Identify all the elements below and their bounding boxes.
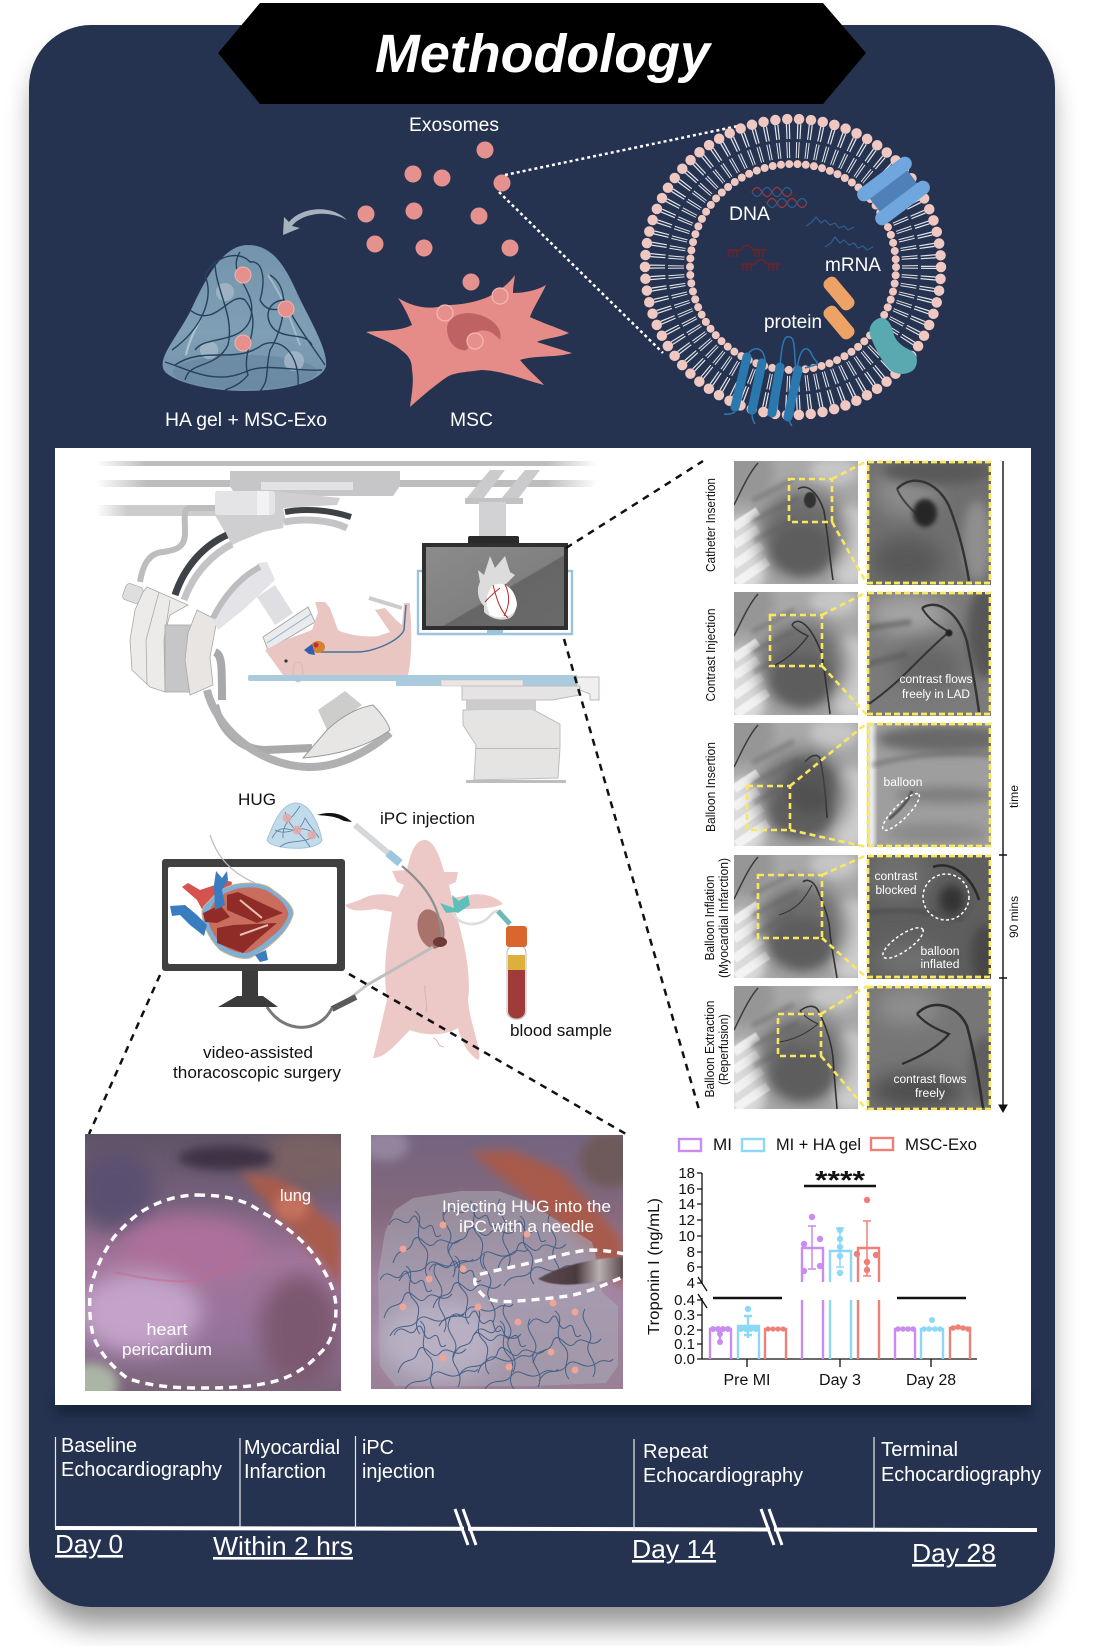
- label: (Reperfusion): [717, 1014, 731, 1085]
- event: baseline: Baseline: [61, 1435, 137, 1457]
- significance: ****: [815, 1165, 866, 1195]
- event: MI: Infarction: [244, 1461, 326, 1483]
- gel particles: [400, 1222, 578, 1374]
- left housing: [130, 587, 217, 695]
- y axis: 10: [678, 1228, 695, 1245]
- event: terminal: Echocardiography: [881, 1464, 1041, 1486]
- monitor screen: [424, 545, 566, 628]
- butterfly needle: [440, 895, 470, 913]
- y axis: [674, 1165, 707, 1368]
- cargo: mRNA strands: [806, 217, 873, 250]
- gel fibres: [380, 1199, 613, 1391]
- bars: Day 28: [895, 1317, 971, 1359]
- label: [703, 858, 731, 978]
- row: balloon inflation: [704, 854, 992, 979]
- legend: MSC-Exo: [905, 1136, 977, 1154]
- event: repeat: Echocardiography: [643, 1465, 803, 1487]
- exosome particles: [358, 142, 518, 290]
- needle: [538, 1257, 623, 1285]
- label: Balloon Inflation: [703, 875, 717, 960]
- label: Exosomes: Exosomes: [409, 115, 499, 136]
- label: iPC injection: iPC injection: [380, 809, 475, 828]
- y axis: 0.3: [674, 1307, 695, 1324]
- outline: balloon: [879, 923, 927, 963]
- arrow: [317, 813, 352, 822]
- y axis title: Troponin I (ng/mL): [646, 1198, 663, 1335]
- x axis: Day 3: [819, 1372, 861, 1389]
- monitor mount: [465, 470, 540, 545]
- connector: [498, 911, 510, 924]
- photo: HUG injection: [371, 1135, 623, 1389]
- legend: MI: [713, 1136, 732, 1154]
- x axis: Pre MI: [724, 1372, 770, 1389]
- label: injecting HUG: Injecting HUG into the: [442, 1197, 611, 1216]
- label: video-assisted thoracoscopic surgery: [173, 1043, 341, 1082]
- knob: [121, 582, 144, 605]
- label: Balloon Insertion: [704, 742, 718, 832]
- event: MI: [244, 1437, 340, 1483]
- timeline: [55, 1435, 1041, 1568]
- annotation: [894, 1074, 967, 1100]
- annotation: contrast: [874, 871, 918, 883]
- blood vial: [506, 926, 527, 1019]
- panel: exosome production: [163, 115, 941, 431]
- catheter: [320, 605, 406, 652]
- label: gel: HA gel + MSC-Exo: [165, 410, 327, 431]
- annotation: inflated: [920, 959, 960, 971]
- row: contrast injection: [706, 590, 992, 716]
- zoom lines: [89, 461, 703, 1134]
- monitor heart: [478, 556, 517, 620]
- label: injecting HUG: iPC with a needle: [459, 1217, 594, 1236]
- y axis: 18: [678, 1165, 695, 1182]
- axis: [55, 1528, 1037, 1530]
- x axis: [702, 1359, 977, 1389]
- monitor frame: [418, 571, 572, 634]
- cargo: tRNA: [727, 246, 781, 271]
- outline: needle: [475, 1250, 625, 1302]
- y axis: 12: [678, 1212, 695, 1229]
- label: (Myocardial Infarction): [717, 858, 731, 978]
- cargo: protein: [821, 274, 857, 342]
- photo: heart and lung: [85, 1134, 341, 1391]
- annotation: balloon: [884, 777, 922, 789]
- event: MI: Myocardial: [244, 1437, 340, 1459]
- arrow: time axis: [999, 461, 1007, 1112]
- label: heart pericardium: heart: [146, 1320, 188, 1339]
- day: within 2 hrs: Within 2 hrs: [213, 1531, 353, 1561]
- ceiling rail: [96, 461, 597, 487]
- exposed heart: [413, 906, 449, 952]
- label: DNA: DNA: [729, 204, 770, 225]
- horizontal arm: [96, 505, 221, 516]
- day: 14: Day 14: [632, 1534, 716, 1564]
- y axis: 4: [687, 1275, 695, 1292]
- label: 90 mins: 90 mins: [1007, 896, 1021, 938]
- cable: [140, 508, 216, 582]
- table base: [462, 686, 580, 780]
- y axis: 0.1: [674, 1336, 695, 1353]
- y axis: 14: [678, 1196, 695, 1213]
- annotation: [920, 946, 960, 971]
- outline: blocked: [923, 874, 969, 920]
- annotation: blocked: [876, 885, 916, 897]
- label: protein: protein: [764, 312, 822, 333]
- carriage: [230, 471, 400, 496]
- row: catheter insertion: [706, 460, 992, 585]
- event: iPC: iPC: [362, 1437, 394, 1459]
- annotation: balloon: [920, 946, 960, 958]
- lower unit: [318, 691, 362, 730]
- label: [703, 1000, 731, 1098]
- annotation: [900, 674, 973, 701]
- syringe: [355, 825, 400, 863]
- icon: HA gel: [163, 245, 326, 391]
- annotation: [874, 871, 918, 897]
- title banner: [218, 3, 866, 104]
- y axis: 0.2: [674, 1322, 695, 1339]
- bars: Day 3: [801, 1197, 879, 1359]
- cargo: DNA: [752, 188, 807, 208]
- y axis: 0.0: [674, 1351, 695, 1368]
- gel overlay: [378, 1191, 618, 1386]
- label: Balloon Extraction: [703, 1000, 717, 1098]
- event: iPC: [362, 1437, 435, 1483]
- arrow: exosomes to gel: [283, 209, 347, 235]
- label: heart pericardium: [122, 1320, 212, 1359]
- annotation: freely: [915, 1088, 945, 1100]
- label: Catheter Insertion: [704, 478, 718, 572]
- panel: x-ray sequence: [703, 441, 1021, 1121]
- outline: heart: [90, 1195, 336, 1388]
- illustration: surgery: [162, 790, 612, 1082]
- label: video-assisted thoracoscopic surgery: thoracoscopic surgery: [173, 1063, 341, 1082]
- label: lung: lung: [280, 1186, 311, 1205]
- y axis: 6: [687, 1259, 695, 1276]
- label: HUG: HUG: [238, 790, 276, 809]
- table: [248, 675, 398, 681]
- monitor: [162, 859, 345, 1007]
- needle: [402, 866, 442, 937]
- legend: MI + HA gel: [776, 1136, 861, 1154]
- balloon outline: [878, 789, 924, 835]
- bars: Pre MI: [710, 1306, 786, 1359]
- scope tube: [210, 835, 255, 883]
- protein: teal: [869, 318, 917, 374]
- break marks: [455, 1509, 782, 1545]
- event: repeat: Repeat: [643, 1441, 708, 1463]
- event: baseline: [61, 1435, 222, 1481]
- inner arm: [213, 562, 315, 650]
- annotation: contrast flows: [894, 1074, 967, 1086]
- event: iPC: injection: [362, 1461, 435, 1483]
- protein: channel: [854, 154, 933, 228]
- scope: [267, 947, 433, 1027]
- label: video-assisted thoracoscopic surgery: video-assisted: [203, 1043, 313, 1062]
- label: injecting HUG: [442, 1197, 611, 1236]
- small heart: [304, 641, 325, 655]
- label: time: time: [1007, 785, 1021, 808]
- heart section: [170, 871, 293, 962]
- day: 28: Day 28: [912, 1538, 996, 1568]
- label: Contrast Injection: [704, 608, 718, 702]
- panel: experiment: [55, 448, 1031, 1405]
- label: blood sample: blood sample: [510, 1021, 612, 1040]
- legend: [679, 1136, 977, 1154]
- significance: [713, 1165, 966, 1298]
- day: 0: Day 0: [55, 1529, 123, 1559]
- icon: MSC cell: [366, 275, 572, 407]
- y axis: 0.4: [674, 1292, 695, 1309]
- tick lines: [56, 1436, 874, 1530]
- zoom lines: [499, 125, 743, 353]
- row: balloon extraction: [704, 984, 992, 1111]
- label: heart pericardium: pericardium: [122, 1340, 212, 1359]
- event: repeat: [643, 1441, 803, 1487]
- lower C-arc: [207, 652, 390, 767]
- exosome membrane: [645, 119, 941, 415]
- C-arm top: [175, 491, 351, 600]
- event: baseline: Echocardiography: [61, 1459, 222, 1481]
- event: terminal: Terminal: [881, 1439, 958, 1461]
- pig side: [265, 602, 411, 682]
- illustration: C-arm angiography: [96, 461, 599, 783]
- row: balloon insertion: [706, 722, 992, 848]
- y axis: 16: [678, 1181, 695, 1198]
- label: MSC: MSC: [450, 410, 493, 431]
- icon: small gel: [267, 803, 322, 848]
- white panel shadow: [55, 1395, 1031, 1415]
- protein: transmembrane: [724, 337, 817, 426]
- pig top view: [345, 840, 503, 1060]
- blood tube line: [453, 911, 503, 924]
- y axis: 8: [687, 1244, 695, 1261]
- label: mRNA: mRNA: [825, 255, 881, 276]
- title: Methodology: [375, 24, 713, 84]
- chart: troponin I: [646, 1136, 977, 1389]
- event: terminal: [881, 1439, 1041, 1486]
- x axis: Day 28: [906, 1372, 956, 1389]
- annotation: contrast flows: [900, 674, 973, 686]
- annotation: freely in LAD: [902, 689, 970, 701]
